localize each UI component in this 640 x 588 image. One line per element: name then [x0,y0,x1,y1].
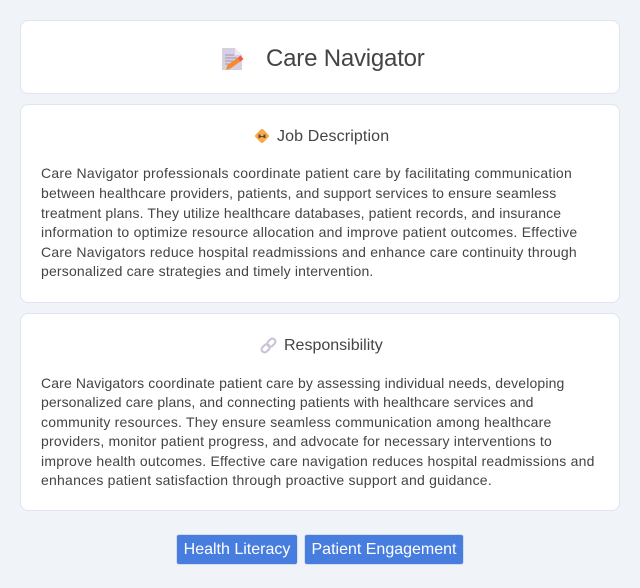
tag: patient engagement [304,534,464,565]
tag: health literacy [176,534,298,565]
heading: job description: Job Description [277,128,389,145]
panel: responsibility [20,313,620,511]
heading: responsibility: Responsibility [284,337,383,354]
text: responsibility body: providers, monitor patient progress, and advocate for necessary interventions to [41,433,552,449]
text: responsibility body: enhances patient satisfaction through proactive support and guidance. [41,472,492,488]
text: responsibility body: Care Navigators coordinate patient care by assessing individual needs, developing [41,375,564,391]
tag: patient engagement: Patient Engagement [312,541,456,558]
text: job description body: personalized care strategies and timely intervention. [41,263,374,279]
text: job description body [41,165,577,279]
text: responsibility body: community resources. They ensure seamless communication among healthcare [41,414,552,430]
text: responsibility body [41,375,595,488]
text: job description body: information to optimize resource allocation and improve patient outcomes. Effective [41,224,577,240]
icon: chain link [260,338,276,354]
tag: health literacy: Health Literacy [184,541,290,558]
panel: title card [20,20,620,94]
text: responsibility body: improve health outcomes. Effective care navigation reduces hospital readmissions and [41,453,595,469]
text: responsibility body: personalized care plans, and connecting patients with healthcare services and [41,394,534,410]
text: job description body: Care Navigator professionals coordinate patient care by facilitating communication [41,165,572,181]
text: job description body: Care Navigators reduce hospital readmissions and enhance care continuity through [41,244,577,260]
text: job description body: between healthcare providers, patients, and support services to ensure seamless [41,185,556,201]
panel: job description [20,104,620,303]
icon: document with pencil [222,48,244,70]
text: job description body: treatment plans. They utilize healthcare databases, patient records, and insurance [41,205,561,221]
icon: diamond sign [255,128,269,144]
title: Care Navigator [266,45,425,72]
